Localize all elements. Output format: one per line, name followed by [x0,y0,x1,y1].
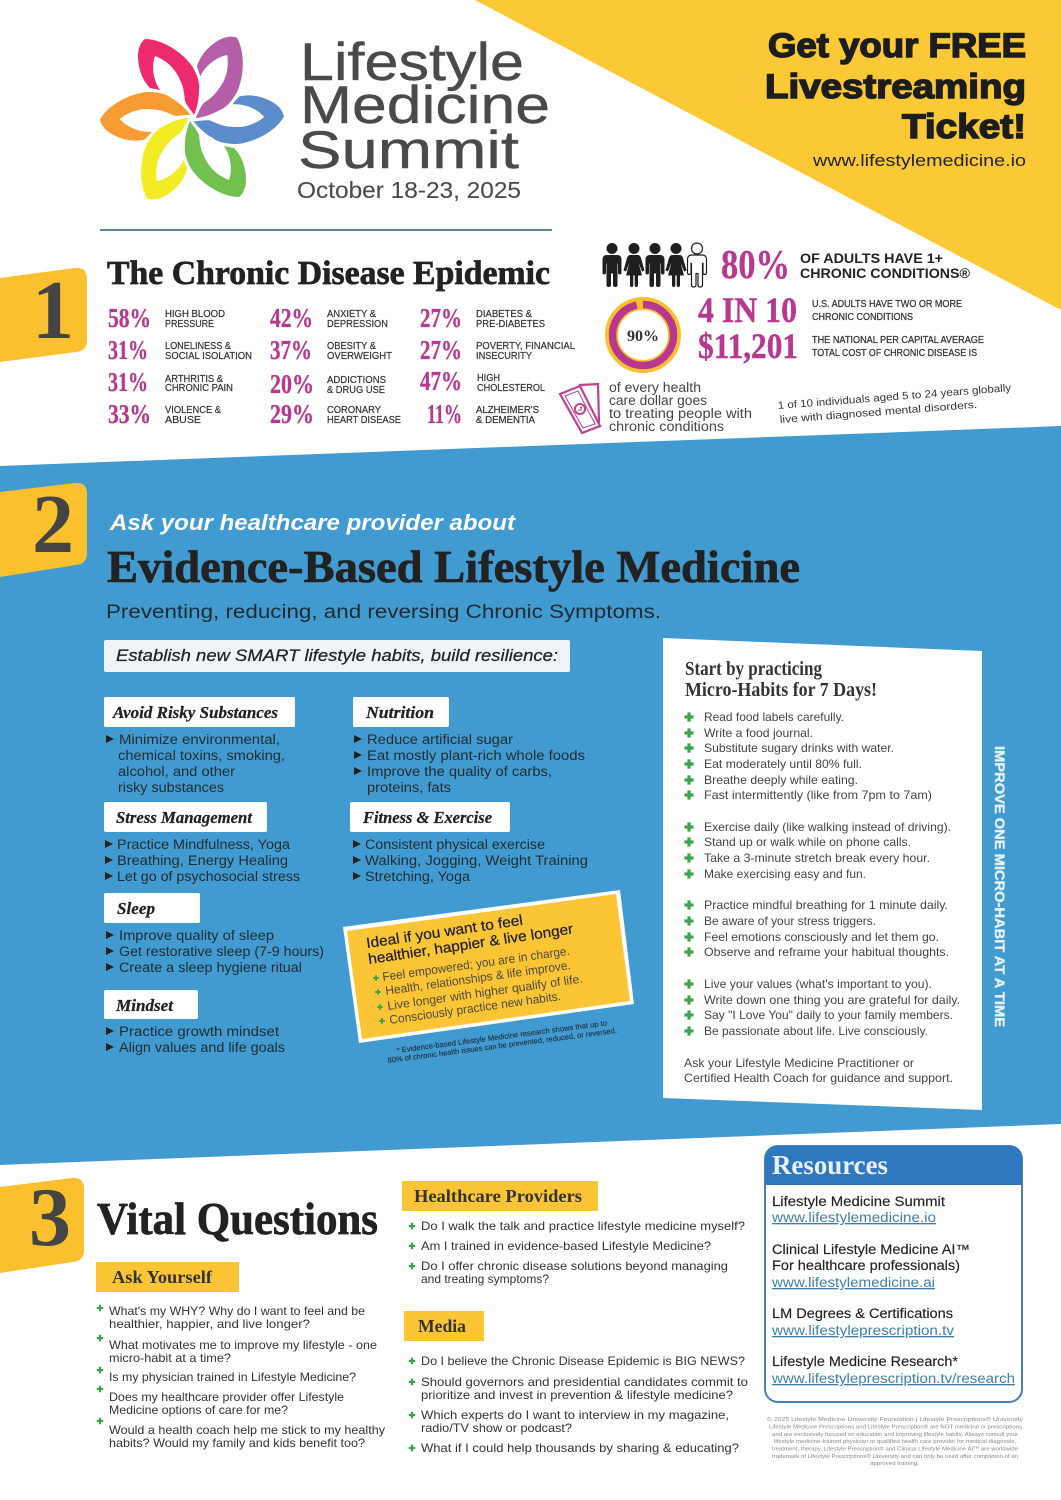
legal footer: approved training. [870,1461,919,1467]
list: mindfulness habits: Observe and reframe your habitual thoughts. [704,946,949,959]
stat: loneliness: 31% [108,335,148,365]
stat: average cost: THE NATIONAL PER CAPITAL AVERAGE [812,335,984,346]
list: movement habits: Make exercising easy and fun. [704,868,866,881]
stat: addictions: 20% [270,369,314,399]
card: stress management: Stress Management [116,808,253,827]
panel: resources: Resources [772,1150,888,1180]
stat: 4 in 10: U.S. ADULTS HAVE TWO OR MORE [812,299,962,310]
card: sleep: Get restorative sleep (7-9 hours) [119,944,324,959]
stat: alzheimers: ALZHEIMER'S [476,405,539,416]
text: mental disorders [777,382,1012,426]
list: mindfulness habits: Practice mindful breathing for 1 minute daily. [704,899,948,912]
list: movement habits: Exercise daily (like walking instead of driving). [704,821,951,834]
text: health care dollar: care dollar goes [609,393,707,408]
panel: resources: For healthcare professionals) [772,1258,960,1273]
legal footer: treatment, therapy. Lifestyle Prescription® and Clinical Lifestyle Medicine AI™ are worldwide [772,1446,1018,1452]
column: healthcare providers [402,1181,745,1286]
card: stress management: Breathing, Energy Healing [117,853,288,868]
stat: high blood pressure: PRESSURE [165,319,214,330]
donut chart: 90 percent [612,304,674,366]
stat: 80 percent of adults: 80% [721,241,790,287]
card: avoid risky substances: chemical toxins, smoking, [118,748,285,763]
legal footer: trademark of Lifestyle Prescriptions® University and can only be used after completion of an [772,1453,1018,1460]
list: values habits [684,978,960,1038]
stat: 80 percent of adults: OF ADULTS HAVE 1+ [800,250,943,266]
column: media: What if I could help thousands by sharing & educating? [421,1441,739,1455]
stat: heart disease: HEART DISEASE [327,415,401,426]
list: values habits: Live your values (what's important to you). [704,978,932,991]
column: media [404,1311,748,1455]
panel: micro-habits [663,638,982,1110]
callout: ideal if you want to feel [343,890,634,1043]
stat: heart disease: 29% [270,399,314,429]
stat: 80 percent of adults: CHRONIC CONDITIONS® [800,265,971,281]
list: mindfulness habits [684,899,949,959]
column: media: prioritize and invest in prevention & lifestyle medicine? [421,1388,733,1402]
column: ask yourself: micro-habit at a time? [109,1351,231,1365]
legal footer [767,1416,1023,1467]
card: stress management [104,802,300,884]
panel closing note: Ask your Lifestyle Medicine Practitioner or [684,1057,914,1070]
stat: arthritis: CHRONIC PAIN [165,383,233,394]
card: nutrition: Eat mostly plant-rich whole foods [367,748,585,763]
stat: high blood pressure: HIGH BLOOD [165,309,225,320]
yellow corner banner [475,0,1061,310]
stat: arthritis: ARTHRITIS & [165,374,223,385]
stat: arthritis [108,367,233,397]
list: food habits: Read food labels carefully. [704,711,844,724]
logo title: Lifestyle [300,33,524,92]
stat: cholesterol [420,366,546,396]
callout: ideal if you want to feel: Ideal if you want to feel [365,913,524,952]
legal footer: lifestyle medicine-trained physician or qualified health care provider for medical diagnosis, [774,1439,1016,1445]
text: mental disorders: 1 of 10 individuals aged 5 to 24 years globally [777,382,1012,412]
stat: violence [108,399,221,429]
panel: resources: Lifestyle Medicine Research* [772,1354,959,1369]
card: mindset: Mindset [115,996,174,1015]
list: values habits: Be passionate about life. Live consciously. [704,1025,928,1038]
ticket call to action: Livestreaming [765,68,1026,106]
column: media: Should governors and presidential candidates commit to [421,1375,748,1389]
legal footer: © 2025 Lifestyle Medicine University Foundation | Lifestyle Prescriptions® University [767,1416,1023,1423]
column: healthcare providers: Do I walk the talk and practice lifestyle medicine myself? [421,1219,745,1233]
column: ask yourself: Is my physician trained in Lifestyle Medicine? [109,1370,356,1384]
column: ask yourself: What motivates me to improve my lifestyle - one [109,1338,377,1352]
stat: poverty: 27% [420,335,462,365]
list: values habits: Write down one thing you are grateful for daily. [704,994,960,1007]
stat: 4 in 10: 4 IN 10 [698,290,797,330]
stat: loneliness: SOCIAL ISOLATION [165,351,252,362]
stat: loneliness: LONELINESS & [165,341,231,352]
logo title: Summit [298,121,519,180]
stat: obesity: OVERWEIGHT [327,351,392,362]
statistics grid [108,303,576,429]
ticket call to action: Ticket! [902,108,1026,146]
column: ask yourself: habits? Would my family and kids benefit too? [109,1436,365,1450]
panel: resources: Lifestyle Medicine Summit [772,1194,945,1209]
stat: 4 in 10: CHRONIC CONDITIONS [812,312,913,323]
stat: poverty: INSECURITY [476,351,532,362]
callout: ideal if you want to feel: healthier, happier & live longer [367,922,574,968]
smart habits banner: Establish new SMART lifestyle habits, build resilience: [116,646,558,665]
panel: resources: Clinical Lifestyle Medicine AI™ [772,1242,970,1257]
stat: high blood pressure: 58% [108,303,151,333]
card: avoid risky substances: alcohol, and other [118,764,236,779]
stat: arthritis: 31% [108,367,148,397]
stat: diabetes [420,303,545,333]
icon: money [560,384,600,433]
panel closing note [684,1057,953,1085]
card: stress management: Practice Mindfulness, Yoga [117,837,291,852]
callout: ideal if you want to feel: Consciously practice new habits. [388,989,562,1027]
stat: high blood pressure [108,303,225,333]
column: media: radio/TV show or podcast? [421,1421,572,1435]
list: movement habits [684,821,951,881]
card: mindset: Practice growth mindset [119,1024,279,1039]
stat: average cost [698,326,984,366]
column: ask yourself: Does my healthcare provider offer Lifestyle [109,1390,344,1404]
text: health care dollar [609,380,752,434]
card: avoid risky substances [104,697,295,795]
column: ask yourself: Ask Yourself [112,1267,213,1287]
stat: diabetes: DIABETES & [476,309,532,320]
stat: alzheimers [427,399,539,429]
ticket call to action: www.lifestylemedicine.io [812,151,1026,170]
stat: anxiety [270,303,388,333]
column: healthcare providers: and treating symptoms? [421,1272,549,1286]
panel: resources [765,1146,1022,1402]
stat: addictions: & DRUG USE [327,385,385,396]
column: healthcare providers: Do I offer chronic disease solutions beyond managing [421,1259,728,1273]
stat: addictions [270,369,386,399]
number tab 2: 2 [32,478,74,571]
column: healthcare providers: Am I trained in evidence-based Lifestyle Medicine? [421,1239,711,1253]
vertical label: IMPROVE ONE MICRO-HABIT AT A TIME [992,746,1007,1027]
column: media: Do I believe the Chronic Disease Epidemic is BIG NEWS? [421,1354,745,1368]
stat: obesity [270,335,392,365]
column: media: Media [418,1316,466,1336]
stat: obesity: OBESITY & [327,341,376,352]
column: ask yourself: healthier, happier, and live longer? [109,1317,310,1331]
logo title: Medicine [300,76,550,135]
stat: cholesterol: HIGH [477,373,500,384]
section 2 heading: Preventing, reducing, and reversing Chronic Symptoms. [106,601,661,623]
card: fitness and exercise: Stretching, Yoga [365,869,471,884]
card: fitness and exercise [350,802,588,884]
stat: heart disease: CORONARY [327,405,381,416]
stat: average cost: $11,201 [698,326,798,366]
stat: diabetes: PRE-DIABETES [476,319,545,330]
heading: vital questions: Vital Questions [97,1194,378,1244]
panel: resources: LM Degrees & Certifications [772,1306,953,1321]
list: food habits: Breathe deeply while eating. [704,774,858,787]
column: ask yourself: What's my WHY? Why do I want to feel and be [109,1304,365,1318]
stat: anxiety: 42% [270,303,313,333]
card: fitness and exercise: Walking, Jogging, Weight Training [365,853,588,868]
footnote: evidence-based research: * Evidence-based Lifestyle Medicine research shows that up to [396,1018,607,1055]
column: media: Which experts do I want to interview in my magazine, [421,1408,729,1422]
column: ask yourself [96,1262,385,1450]
stat: addictions: ADDICTIONS [327,375,386,386]
number tab 3: 3 [29,1171,71,1264]
card: mindset [104,990,285,1055]
card: mindset: Align values and life goals [119,1040,285,1055]
stat: alzheimers: & DEMENTIA [476,415,535,426]
stat: poverty: POVERTY, FINANCIAL [476,341,576,352]
card: nutrition: Reduce artificial sugar [367,732,514,747]
card: avoid risky substances: risky substances [118,780,224,795]
stat: cholesterol: 47% [420,366,462,396]
column: ask yourself: Medicine options of care for me? [109,1403,288,1417]
panel: resources: www.lifestyleprescription.tv/research [771,1371,1015,1386]
panel closing note: Certified Health Coach for guidance and support. [684,1072,953,1085]
logo title: October 18-23, 2025 [297,177,521,203]
list: food habits [684,711,932,802]
card: sleep: Create a sleep hygiene ritual [119,960,302,975]
smart habits banner [104,640,570,672]
stat: poverty [420,335,576,365]
logo: flower [97,32,287,204]
list: mindfulness habits: Feel emotions consciously and let them go. [704,931,939,944]
card: nutrition: proteins, fats [367,780,451,795]
panel: resources: www.lifestylemedicine.ai [771,1275,935,1290]
stat: obesity: 37% [270,335,312,365]
stat: 80 percent of adults [721,241,971,287]
heading: chronic disease epidemic: The Chronic Disease Epidemic [107,255,550,292]
card: stress management: Let go of psychosocial stress [117,869,300,884]
section 2 heading [106,510,800,623]
donut chart: 90 percent: 90% [627,328,659,345]
card: sleep: Sleep [117,899,155,918]
number tab 1 [0,264,87,362]
card: sleep: Improve quality of sleep [119,928,274,943]
text: health care dollar: chronic conditions [609,419,724,434]
card: avoid risky substances: Minimize environmental, [119,732,280,747]
list: movement habits: Stand up or walk while on phone calls. [704,836,911,849]
stat: average cost: TOTAL COST OF CHRONIC DISEASE IS [812,348,977,359]
callout: ideal if you want to feel: Live longer with higher qualify of life. [386,972,584,1013]
panel: resources: www.lifestyleprescription.tv [771,1323,954,1338]
text: mental disorders: live with diagnosed mental disorders. [779,399,978,426]
stat: anxiety: ANXIETY & [327,309,376,320]
footnote: evidence-based research: 80% of chronic health issues can be prevented, reduced, or reversed. [387,1026,617,1065]
list: values habits: Say "I Love You" daily to your family members. [704,1009,953,1022]
legal footer: Lifestyle Medicine Prescriptions and Lifestyle Prescription® are NOT medicine rx prescriptions [769,1424,1022,1430]
number tab 1: 1 [32,264,74,357]
list: food habits: Substitute sugary drinks with water. [704,742,894,755]
stat: heart disease [270,399,401,429]
card: nutrition [353,697,585,795]
stat: anxiety: DEPRESSION [327,319,388,330]
section 2 heading: Ask your healthcare provider about [109,510,517,535]
panel heading: Micro-Habits for 7 Days! [685,680,877,701]
card: nutrition: Improve the quality of carbs, [367,764,552,779]
list: food habits: Eat moderately until 80% full. [704,758,862,771]
ticket call to action [765,27,1026,170]
list: movement habits: Take a 3-minute stretch break every hour. [704,852,930,865]
stat: violence: VIOLENCE & [165,405,221,416]
text: health care dollar: to treating people with [609,406,752,421]
panel: resources: www.lifestylemedicine.io [771,1210,936,1225]
card: avoid risky substances: Avoid Risky Substances [112,703,278,722]
legal footer: and are exclusively focused on education and improving lifestyle habits. Always consult your [772,1432,1018,1438]
number tab 3 [0,1171,84,1273]
card: fitness and exercise: Fitness & Exercise [362,808,492,827]
list: food habits: Write a food journal. [704,727,813,740]
card: nutrition: Nutrition [365,703,434,722]
panel heading [685,659,877,701]
list: mindfulness habits: Be aware of your stress triggers. [704,915,876,928]
number tab 2 [0,478,87,577]
card: sleep [104,893,324,975]
text: health care dollar: of every health [609,380,701,395]
stat: violence: ABUSE [165,415,201,426]
stat: violence: 33% [108,399,151,429]
column: healthcare providers: Healthcare Providers [414,1186,582,1206]
column: ask yourself: Would a health coach help me stick to my healthy [109,1423,385,1437]
header rule [100,229,552,231]
callout: ideal if you want to feel: Feel empowered; you are in charge. [381,944,571,984]
callout: ideal if you want to feel: Health, relationships & life improve. [384,958,572,998]
logo title [297,33,550,203]
icon: people [602,243,706,287]
stat: alzheimers: 11% [427,399,462,429]
card: fitness and exercise: Consistent physical exercise [365,837,545,852]
section 2 heading: Evidence-Based Lifestyle Medicine [107,542,800,592]
stat: diabetes: 27% [420,303,462,333]
list: food habits: Fast intermittently (like from 7pm to 7am) [704,789,932,802]
stat: 4 in 10 [698,290,962,330]
stat: cholesterol: CHOLESTEROL [477,383,546,394]
panel heading: Start by practicing [685,659,822,680]
blue section background [0,426,1061,1165]
ticket call to action: Get your FREE [768,27,1026,65]
stat: loneliness [108,335,252,365]
